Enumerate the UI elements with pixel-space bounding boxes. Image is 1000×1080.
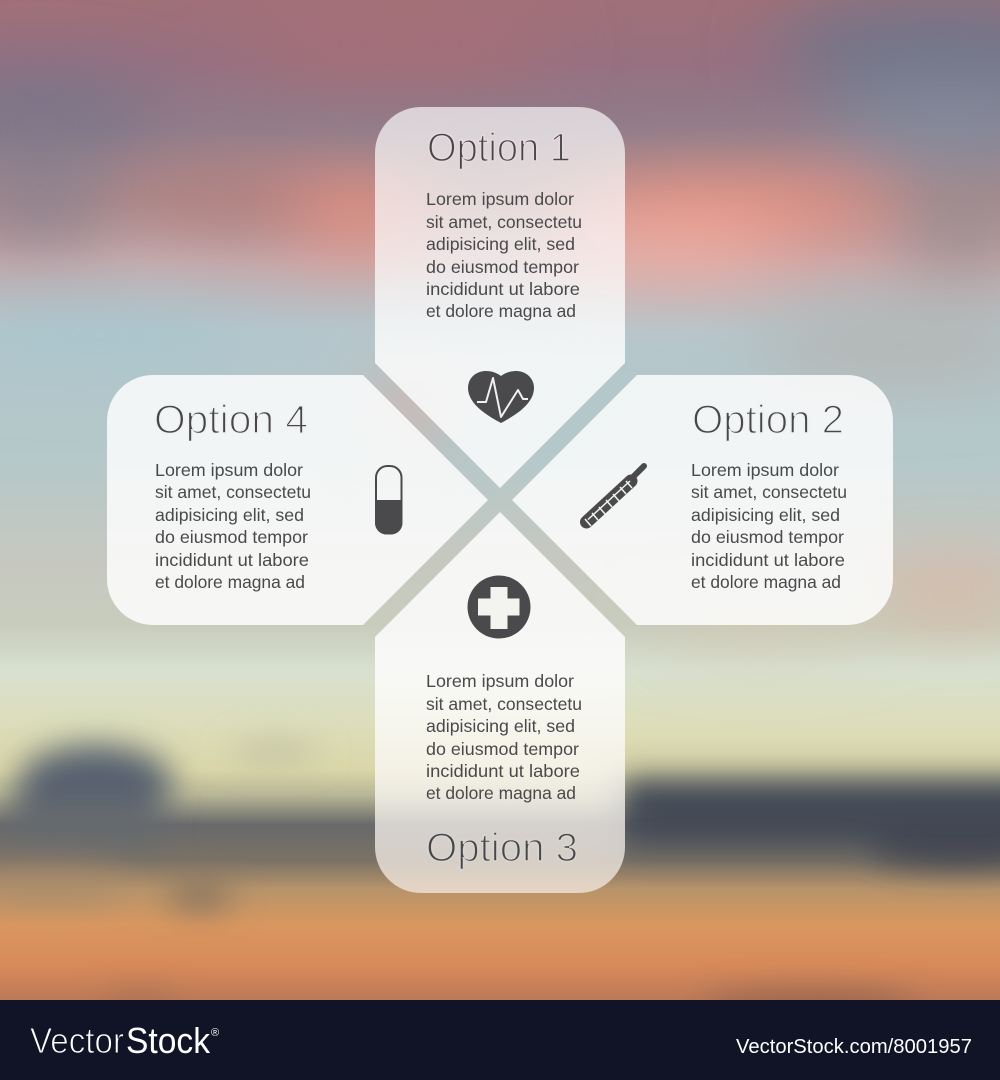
text block: option 3: Lorem ipsum dolor: [426, 671, 574, 691]
text block: option 4: do eiusmod tempor: [155, 527, 308, 547]
panel: option 4: [107, 375, 488, 625]
panel: option 2: [512, 375, 893, 625]
text block: option 2: do eiusmod tempor: [691, 527, 844, 547]
text block: option 2: et dolore magna ad: [691, 572, 841, 592]
heading: option 4: Option 4: [154, 398, 308, 442]
text block: option 2: sit amet, consectetu: [691, 482, 847, 502]
heading: option 1: Option 1: [427, 126, 571, 170]
text block: option 3: incididunt ut labore: [426, 761, 580, 781]
icon: capsule: [375, 466, 402, 534]
text block: option 2: Lorem ipsum dolor: [691, 460, 839, 480]
text block: option 4: adipisicing elit, sed: [155, 505, 304, 525]
logo: VectorStock: [30, 1020, 211, 1061]
text block: option 2: adipisicing elit, sed: [691, 505, 840, 525]
text block: option 1: adipisicing elit, sed: [426, 234, 575, 254]
diagram: four options: [107, 107, 893, 893]
text block: option 1: do eiusmod tempor: [426, 257, 579, 277]
text block: option 3: [426, 671, 582, 803]
text block: option 2: incididunt ut labore: [691, 550, 845, 570]
text block: option 4: Lorem ipsum dolor: [155, 460, 303, 480]
text block: option 4: et dolore magna ad: [155, 572, 305, 592]
panel: option 3: [375, 512, 625, 893]
panel: option 1: [375, 107, 625, 488]
text block: option 2: [691, 460, 847, 592]
text block: option 3: et dolore magna ad: [426, 783, 576, 803]
text block: option 3: do eiusmod tempor: [426, 739, 579, 759]
icon: medical cross: [468, 576, 530, 638]
text block: option 1: Lorem ipsum dolor: [426, 189, 574, 209]
heading: option 2: Option 2: [692, 398, 844, 442]
footer bar: [0, 1000, 1000, 1080]
image reference: VectorStock.com/8001957: [736, 1036, 972, 1058]
text block: option 3: sit amet, consectetu: [426, 694, 582, 714]
text block: option 4: sit amet, consectetu: [155, 482, 311, 502]
text block: option 1: sit amet, consectetu: [426, 212, 582, 232]
text block: option 1: et dolore magna ad: [426, 301, 576, 321]
heading: option 3: Option 3: [426, 826, 578, 870]
logo: VectorStock: Vector: [30, 1020, 124, 1061]
text block: option 4: [155, 460, 311, 592]
text block: option 3: adipisicing elit, sed: [426, 716, 575, 736]
text block: option 1: incididunt ut labore: [426, 279, 580, 299]
logo: VectorStock: Stock: [126, 1020, 211, 1061]
icon: thermometer: [585, 466, 644, 526]
text block: option 1: [426, 189, 582, 321]
icon: heart with pulse: [468, 371, 534, 423]
registered mark: ®: [211, 1027, 219, 1039]
text block: option 4: incididunt ut labore: [155, 550, 309, 570]
